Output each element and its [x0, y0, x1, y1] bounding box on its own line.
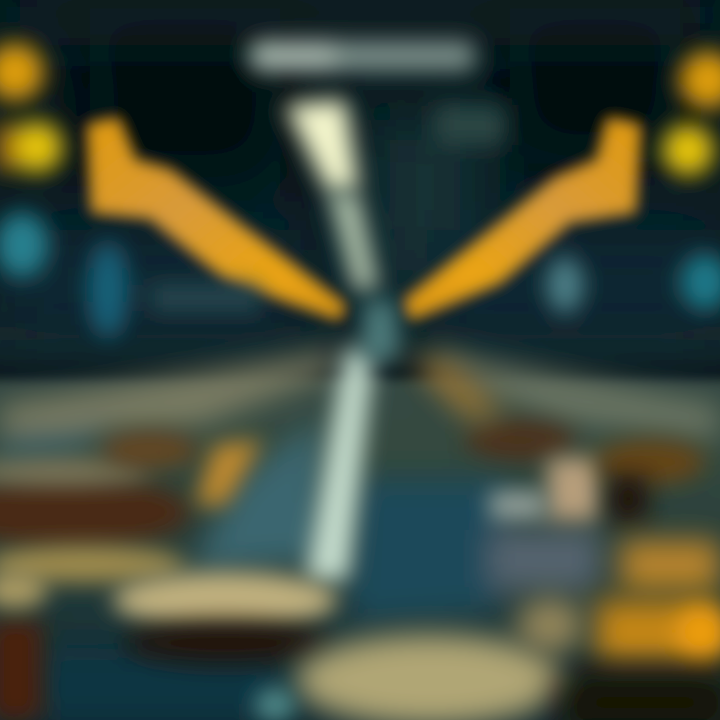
left yellow arrow	[88, 118, 345, 320]
right bowls	[295, 360, 720, 720]
blue lights	[0, 213, 720, 338]
bottom glow	[255, 689, 295, 720]
right lamps	[663, 52, 720, 175]
title glow	[250, 42, 505, 145]
left bowls	[0, 432, 337, 720]
floor bands	[0, 350, 720, 720]
central light beam	[285, 100, 400, 580]
upper wall shading	[0, 0, 720, 340]
left lamps	[0, 44, 62, 172]
right yellow arrow	[405, 118, 640, 320]
